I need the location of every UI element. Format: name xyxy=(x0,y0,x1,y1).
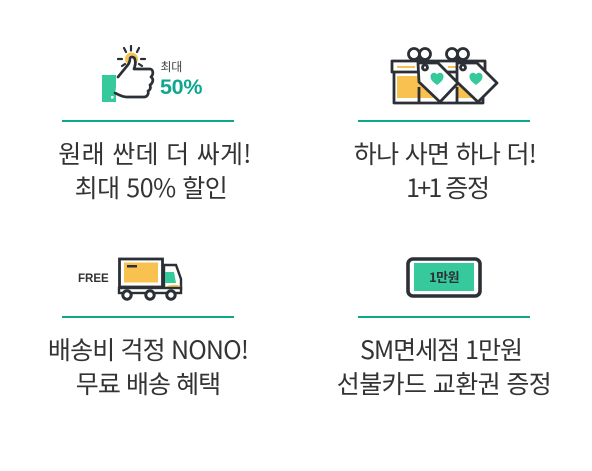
text: free shipping: 무료 배송 혜택 xyxy=(76,365,220,401)
text: free shipping: 배송비 걱정 NONO! xyxy=(48,331,248,367)
text: one plus one xyxy=(354,135,536,205)
text: up to: 최대 xyxy=(160,58,182,75)
divider: bottom right xyxy=(358,316,530,318)
text: one plus one: 하나 사면 하나 더! xyxy=(354,135,536,171)
icon: thumbs up with sparkle xyxy=(102,46,153,102)
text: gift card offer: SM면세점 1만원 xyxy=(360,331,522,367)
divider: bottom left xyxy=(62,316,234,318)
text: free shipping xyxy=(48,331,248,401)
divider: top right xyxy=(358,120,530,122)
text: one plus one: 1+1 증정 xyxy=(406,169,489,205)
divider: top left xyxy=(62,120,234,122)
text: gift card offer: 선불카드 교환권 증정 xyxy=(337,365,551,401)
icon: delivery truck xyxy=(119,259,181,299)
icon: gift boxes with tags xyxy=(392,48,497,103)
text: gift card offer xyxy=(337,331,551,401)
text: 50%: 50% xyxy=(160,75,202,99)
text: FREE: FREE xyxy=(78,273,109,285)
text: half price xyxy=(58,135,252,205)
text: half price: 최대 50% 할인 xyxy=(75,169,227,205)
icon: gift card xyxy=(408,259,480,296)
text: half price: 원래 싼데 더 싸게! xyxy=(58,135,252,171)
icon: gift card: 1만원 xyxy=(429,267,459,286)
